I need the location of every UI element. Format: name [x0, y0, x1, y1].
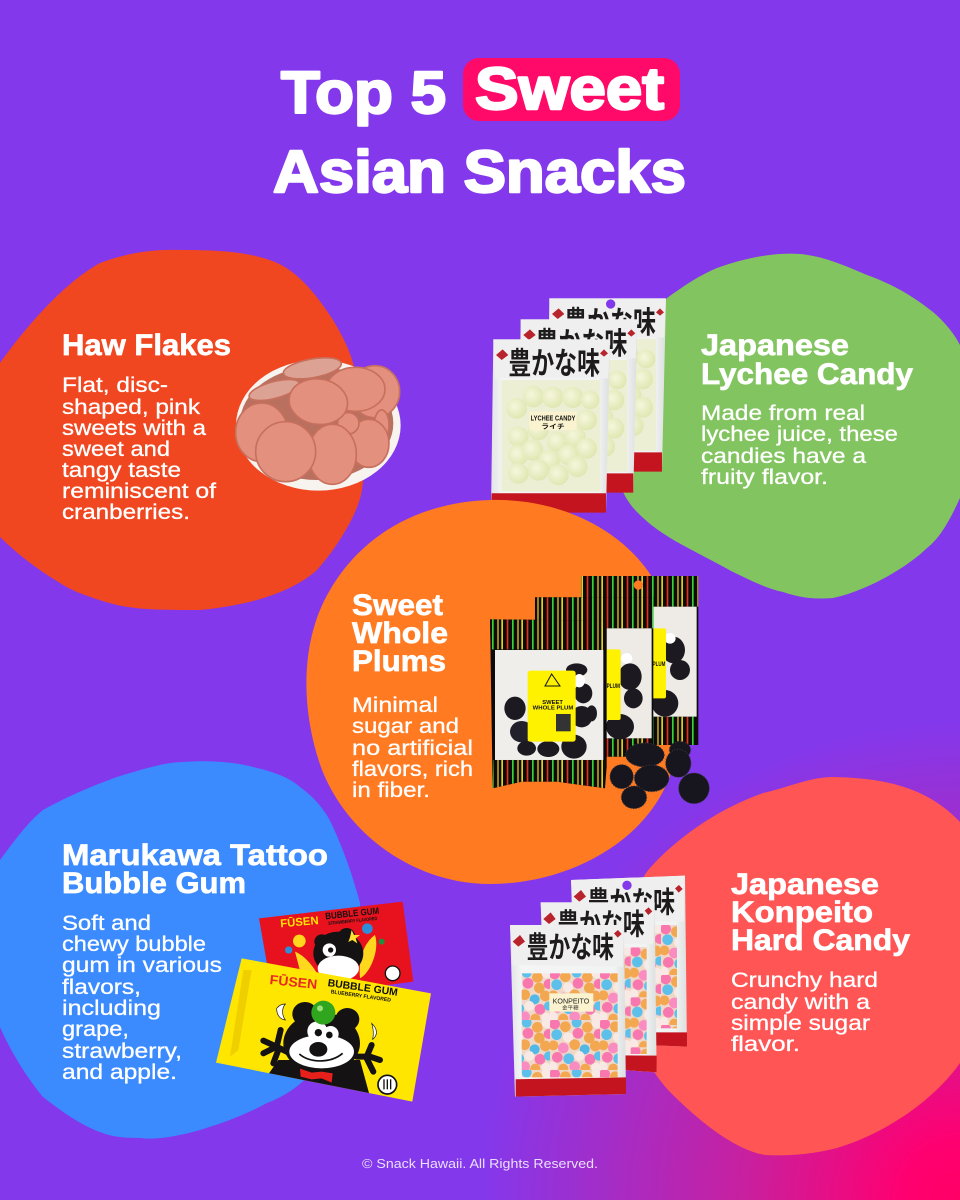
image: konpeito bags	[510, 876, 687, 1097]
body text	[62, 911, 222, 1084]
body text: flavor.	[731, 1032, 800, 1056]
bag: front	[490, 619, 607, 788]
pack: blueberry: BLUEBERRY FLAVORED	[330, 989, 391, 1004]
body text: chewy bubble	[62, 932, 206, 956]
image: lychee candy bags	[491, 297, 666, 513]
body text: Crunchy hard	[731, 968, 878, 992]
bag: front: 豊かな味	[508, 338, 600, 383]
heading: Japanese	[731, 868, 879, 901]
body text: in fiber.	[352, 778, 430, 802]
pack: strawberry: BUBBLE GUM	[325, 906, 380, 921]
heading: Sweet	[352, 589, 443, 622]
blob: bubble gum	[0, 761, 360, 1139]
highlight pill: Sweet: Sweet	[475, 56, 664, 122]
heading	[731, 868, 910, 957]
body text: and apple.	[62, 1060, 177, 1084]
bag: back	[571, 876, 687, 1047]
bag: front	[491, 338, 610, 513]
body text: sweet and	[62, 437, 170, 461]
pack: strawberry: FŪSEN	[280, 915, 319, 930]
body text	[62, 373, 216, 524]
panel: japanese konpeito hard candy	[510, 777, 960, 1155]
heading: Plums	[352, 645, 446, 678]
pack: strawberry	[259, 902, 414, 986]
image: bowl of haw flakes	[236, 354, 401, 491]
bag: front	[510, 924, 626, 1097]
body text	[731, 968, 878, 1056]
body text	[701, 401, 898, 489]
body text: reminiscent of	[62, 479, 216, 503]
body text: tangy taste	[62, 458, 181, 482]
body text: no artificial	[352, 736, 473, 760]
loose plums	[610, 741, 709, 809]
title	[273, 56, 686, 205]
body text: grape,	[62, 1017, 129, 1041]
blob: haw flakes	[0, 250, 364, 610]
body text: cranberries.	[62, 500, 190, 524]
body text: simple sugar	[731, 1011, 870, 1035]
body text: Minimal	[352, 693, 438, 717]
bag: back: PLUM	[653, 662, 665, 668]
title: Top 5	[281, 60, 446, 126]
bag: front: SWEET	[542, 700, 564, 706]
bag: back: 豊かな味	[564, 297, 656, 342]
body text: Flat, disc-	[62, 373, 168, 397]
heading: Whole	[352, 617, 448, 650]
body text: strawberry,	[62, 1039, 182, 1063]
blob: sweet whole plums	[306, 500, 681, 884]
pack: blueberry: BUBBLE GUM	[327, 978, 398, 999]
bag: front: WHOLE PLUM	[533, 706, 574, 712]
body text: flavors,	[62, 975, 141, 999]
heading: Hard Candy	[731, 924, 910, 957]
body text: flavors, rich	[352, 757, 473, 781]
panel: haw flakes	[0, 250, 401, 610]
bag: front: 豊かな味	[527, 924, 614, 966]
panel: marukawa tattoo bubble gum	[0, 761, 437, 1139]
bag: back	[581, 576, 698, 745]
bag: middle	[518, 318, 637, 493]
footer: © Snack Hawaii. All Rights Reserved.	[362, 1156, 598, 1171]
body text: sugar and	[352, 714, 459, 738]
heading	[701, 329, 913, 391]
body text: Soft and	[62, 911, 151, 935]
bag: front: LYCHEE CANDY	[531, 413, 575, 422]
body text: candy with a	[731, 990, 870, 1014]
heading: Haw Flakes	[62, 329, 231, 362]
blob: konpeito	[625, 777, 960, 1155]
bag: middle: PLUM	[607, 684, 620, 690]
image: plum bags	[490, 576, 709, 809]
pack: blueberry: FŪSEN	[269, 972, 318, 992]
bag: middle	[541, 902, 657, 1072]
heading: Marukawa Tattoo	[62, 839, 328, 872]
bag: front: 金平糖	[562, 1005, 579, 1012]
body text: sweets with a	[62, 416, 206, 440]
title: Asian Snacks	[273, 139, 686, 205]
pack: strawberry: STRAWBERRY FLAVORED	[328, 916, 378, 926]
heading	[62, 839, 328, 900]
bag: middle: 豊かな味	[557, 902, 645, 944]
body text: lychee juice, these	[701, 422, 898, 446]
heading	[352, 589, 448, 678]
bag: front: KONPEITO	[553, 996, 589, 1005]
bag: middle: 豊かな味	[536, 318, 627, 363]
bag: middle	[535, 597, 653, 757]
body text: fruity flavor.	[701, 465, 828, 489]
bag: back: 豊かな味	[588, 879, 675, 921]
heading: Lychee Candy	[701, 358, 913, 391]
image: gum packs	[210, 900, 437, 1107]
body text	[352, 693, 473, 802]
pack: blueberry	[216, 958, 431, 1102]
panel: japanese lychee candy	[491, 254, 960, 599]
body text: Made from real	[701, 401, 865, 425]
body text: candies have a	[701, 444, 866, 468]
body text: shaped, pink	[62, 395, 200, 419]
heading: Japanese	[701, 329, 849, 362]
bag: back	[547, 297, 666, 472]
heading: Konpeito	[731, 896, 873, 929]
blob: lychee candy	[612, 254, 960, 599]
body text: gum in various	[62, 953, 222, 977]
panel: sweet whole plums	[306, 500, 709, 884]
body text: including	[62, 996, 161, 1020]
bag: front: ライチ	[541, 422, 565, 430]
heading: Bubble Gum	[62, 867, 246, 900]
